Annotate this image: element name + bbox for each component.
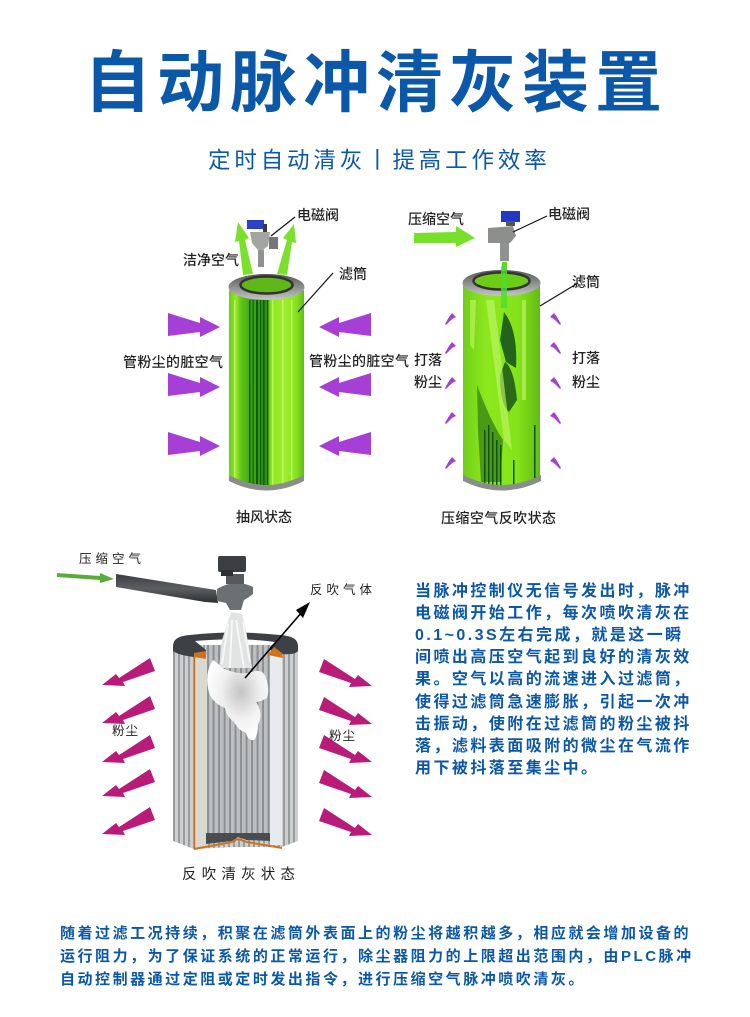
air jet and cloud [207, 612, 268, 740]
text block: working principle: 间喷出高压空气起到良好的清灰效 [415, 647, 692, 666]
icon: solenoid valve [488, 211, 547, 282]
text block: working principle: 用下被抖落至集尘中。 [415, 758, 600, 777]
text block: working principle: 0.1~0.3S左右完成，就是这一瞬 [415, 625, 684, 644]
labels: 管粉尘的脏空气 [309, 353, 409, 369]
arrow: reverse blow gas [245, 602, 310, 678]
labels: 粉尘 [112, 723, 139, 738]
arrow: compressed air [414, 226, 475, 247]
text block: footer note [60, 924, 694, 988]
labels: 反吹清灰状态 [182, 866, 300, 883]
labels: 压缩空气 [79, 551, 145, 566]
labels: 电磁阀 [297, 207, 339, 223]
arrows: clean air up [235, 222, 296, 275]
diagram: pulse back-blow cutaway [57, 551, 376, 883]
text block: working principle: 使得过滤筒急速膨胀，引起一次冲 [415, 692, 692, 711]
labels [408, 206, 600, 526]
labels: 滤筒 [339, 266, 367, 282]
labels: 粉尘 [414, 374, 442, 390]
text block: footer note: 运行阻力，为了保证系统的正常运行，除尘器阻力的上限超出范围内，由PLC脉冲 [60, 947, 694, 965]
labels: 粉尘 [329, 728, 356, 743]
icon: solenoid valve [247, 217, 295, 267]
text block: footer note: 自动控制器通过定阻或定时发出指令，进行压缩空气脉冲喷吹清灰。 [60, 970, 586, 988]
dust arrows: left [445, 313, 456, 469]
labels: 管粉尘的脏空气 [123, 354, 223, 370]
labels: 压缩空气反吹状态 [441, 510, 556, 526]
labels [79, 551, 376, 883]
dust arrows: right [319, 659, 372, 836]
labels: 打落 [414, 352, 442, 368]
text block: working principle: 电磁阀开始工作，每次喷吹清灰在 [415, 603, 692, 622]
subtitle: 定时自动清灰丨提高工作效率 [208, 148, 551, 173]
diagram: suction state [123, 207, 409, 525]
text block: working principle: 落，滤料表面吸附的微尘在气流作 [415, 736, 692, 755]
leader line [298, 273, 333, 312]
title: 自动脉冲清灰装置 [84, 46, 668, 121]
filter cartridge: green [228, 274, 304, 490]
text block: footer note: 随着过滤工况持续，积聚在滤筒外表面上的粉尘将越积越多，相应就会增加设备的 [60, 924, 691, 942]
text block: working principle [415, 581, 692, 777]
text block: working principle: 击振动，使附在过滤筒的粉尘被抖 [415, 714, 692, 733]
text block: working principle: 果。空气以高的流速进入过滤筒， [415, 669, 692, 688]
labels [123, 207, 409, 525]
labels: 抽风状态 [236, 509, 292, 525]
diagram: reverse blow state [408, 206, 600, 526]
text block: working principle: 当脉冲控制仪无信号发出时，脉冲 [415, 581, 692, 600]
labels: 反吹气体 [310, 582, 376, 597]
arrows: dusty air left [168, 313, 220, 456]
labels: 滤筒 [572, 274, 600, 290]
arrow: compressed air [57, 573, 114, 583]
icon: pulse valve and pipe [116, 556, 253, 610]
cartridge cutaway [173, 632, 298, 850]
labels: 压缩空气 [408, 211, 464, 227]
dust arrows: left [102, 658, 155, 835]
labels: 电磁阀 [548, 206, 590, 222]
filter cartridge: green, blown [462, 266, 541, 490]
labels: 洁净空气 [183, 252, 239, 268]
labels: 粉尘 [572, 374, 600, 390]
labels: 打落 [572, 350, 600, 366]
dust arrows: right [550, 313, 561, 469]
arrows: dusty air right [319, 313, 371, 456]
leader line [540, 283, 578, 306]
